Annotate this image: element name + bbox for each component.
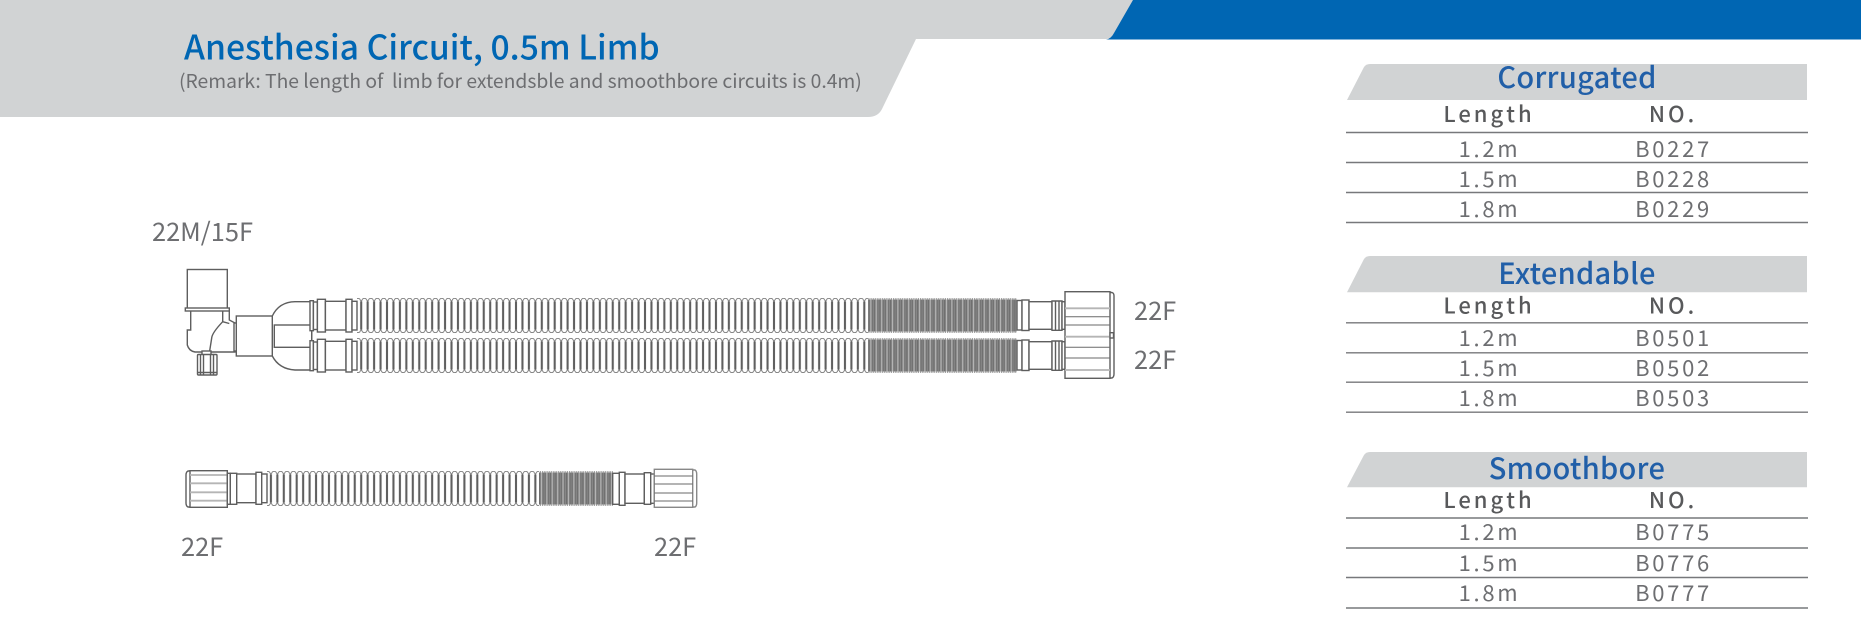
remark: (Remark: The length of limb for extendsble and smoothbore circuits is 0.4m) [179,66,862,94]
row 2: 1.5m [1459,351,1520,383]
row 1: B0775 [1635,515,1712,547]
row 2: 1.5m [1459,162,1520,194]
row 2 [1459,546,1712,578]
row 1: 1.2m [1459,515,1520,547]
panel: extendable table [1346,251,1808,413]
row 3 [1459,192,1712,224]
label: 22M/15F: 22M/15F [152,213,253,249]
mount [185,270,229,311]
row 1 [1459,132,1712,164]
header band: grey [0,0,1135,117]
title: Anesthesia Circuit, 0.5m Limb [184,20,660,70]
panel: smoothbore table [1346,446,1808,608]
row 2: B0776 [1635,546,1712,578]
row 3 [1459,576,1712,608]
row 1: 1.2m [1459,321,1520,353]
heading: Smoothbore [1489,446,1665,488]
heading band [1347,256,1807,292]
label: 22F left: 22F [181,528,223,564]
column headers: Length [1443,97,1535,129]
row 3: B0503 [1635,381,1712,413]
row 1: B0227 [1635,132,1712,164]
column headers [1443,483,1697,515]
right connector [613,469,697,507]
heading: Corrugated [1497,55,1657,97]
column headers: NO. [1649,288,1697,320]
elbow body [187,310,235,352]
label: 22F right: 22F [654,528,696,564]
label: 22F lower: 22F [1134,341,1176,377]
row 3 [1459,381,1712,413]
row 2: 1.5m [1459,546,1520,578]
heading: Extendable [1498,251,1656,293]
row 1: 1.2m [1459,132,1520,164]
row 2 [1459,351,1712,383]
cap [198,351,217,375]
diagram: double-limb circuit [185,270,1114,378]
row 2: B0228 [1635,162,1712,194]
row 1 [1459,321,1712,353]
row 3: B0229 [1635,192,1712,224]
row 3: 1.8m [1459,381,1520,413]
left connector [186,471,267,507]
row 3: B0777 [1635,576,1712,608]
label: 22F upper: 22F [1134,292,1176,328]
diagram: single limb [186,469,697,507]
panel: corrugated table [1346,55,1808,224]
limb 2 [310,338,1065,373]
column headers: Length [1443,288,1535,320]
limb 1 [310,298,1065,333]
heading band [1347,452,1807,487]
row 1 [1459,515,1712,547]
row 1: B0501 [1635,321,1712,353]
column headers: Length [1443,483,1535,515]
column headers: NO. [1649,97,1697,129]
row 2: B0502 [1635,351,1712,383]
row 3: 1.8m [1459,192,1520,224]
row 2 [1459,162,1712,194]
column headers [1443,97,1697,129]
column headers [1443,288,1697,320]
large connector [1065,292,1114,378]
heading band [1347,64,1807,100]
row 3: 1.8m [1459,576,1520,608]
header band: blue [1106,0,1861,40]
column headers: NO. [1649,483,1697,515]
y-piece [234,302,312,370]
